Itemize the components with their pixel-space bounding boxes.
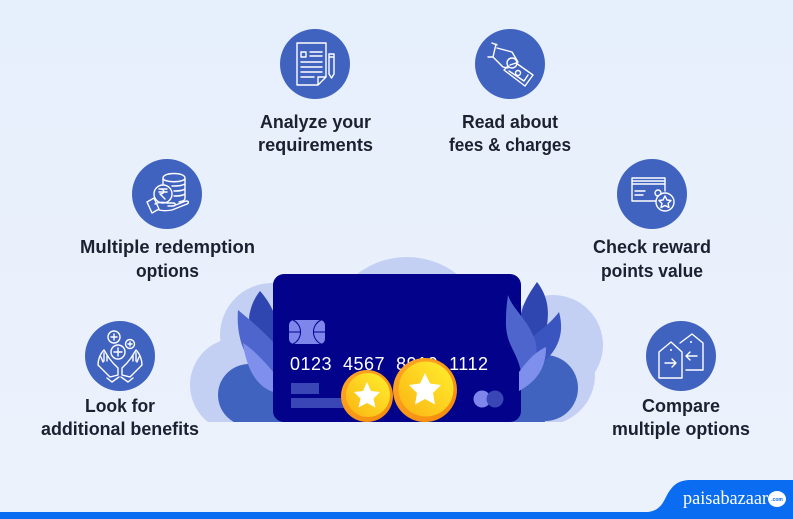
card network logo xyxy=(474,390,504,408)
leaves: right front overlapping the card xyxy=(506,295,546,391)
icon: two price tags with arrows xyxy=(646,321,716,391)
label: fees & charges xyxy=(449,135,571,155)
label: options xyxy=(136,261,199,281)
leaves: left xyxy=(238,291,280,393)
label: Read about xyxy=(462,112,558,132)
step: multiple redemption options xyxy=(80,159,255,281)
icon: hands with plus coins xyxy=(85,321,155,391)
brand .com badge xyxy=(768,491,786,507)
coin: small xyxy=(341,370,393,422)
label: Check reward xyxy=(593,237,711,257)
card number: 0123 4567 8910 1112 xyxy=(290,354,488,374)
card name bars xyxy=(291,383,351,408)
step: check reward points value xyxy=(593,159,711,281)
step: look for additional benefits xyxy=(41,321,199,439)
credit card xyxy=(273,274,521,422)
step: read about fees and charges xyxy=(449,29,571,155)
illustration: clouds and leaves behind the card xyxy=(190,257,603,432)
label: Compare xyxy=(642,396,720,416)
footer bar and brand tab xyxy=(0,480,793,519)
coin: large xyxy=(393,358,457,422)
label: Look for xyxy=(85,396,155,416)
icon: hand with rupee coin and stack xyxy=(132,159,202,229)
label: Multiple redemption xyxy=(80,237,255,257)
label: multiple options xyxy=(612,419,750,439)
label: Analyze your xyxy=(260,112,371,132)
icon: card with star badge xyxy=(617,159,687,229)
icon: hand holding banknote xyxy=(475,29,545,99)
leaves: right back xyxy=(520,282,561,372)
card chip xyxy=(289,320,325,344)
brand .com badge: .com xyxy=(771,497,783,503)
label: additional benefits xyxy=(41,419,199,439)
label: points value xyxy=(601,261,703,281)
brand name: paisabazaar xyxy=(683,488,769,509)
label: requirements xyxy=(258,135,373,155)
step: compare multiple options xyxy=(612,321,750,439)
step: analyze your requirements xyxy=(258,29,373,155)
icon: document and pencil xyxy=(280,29,350,99)
